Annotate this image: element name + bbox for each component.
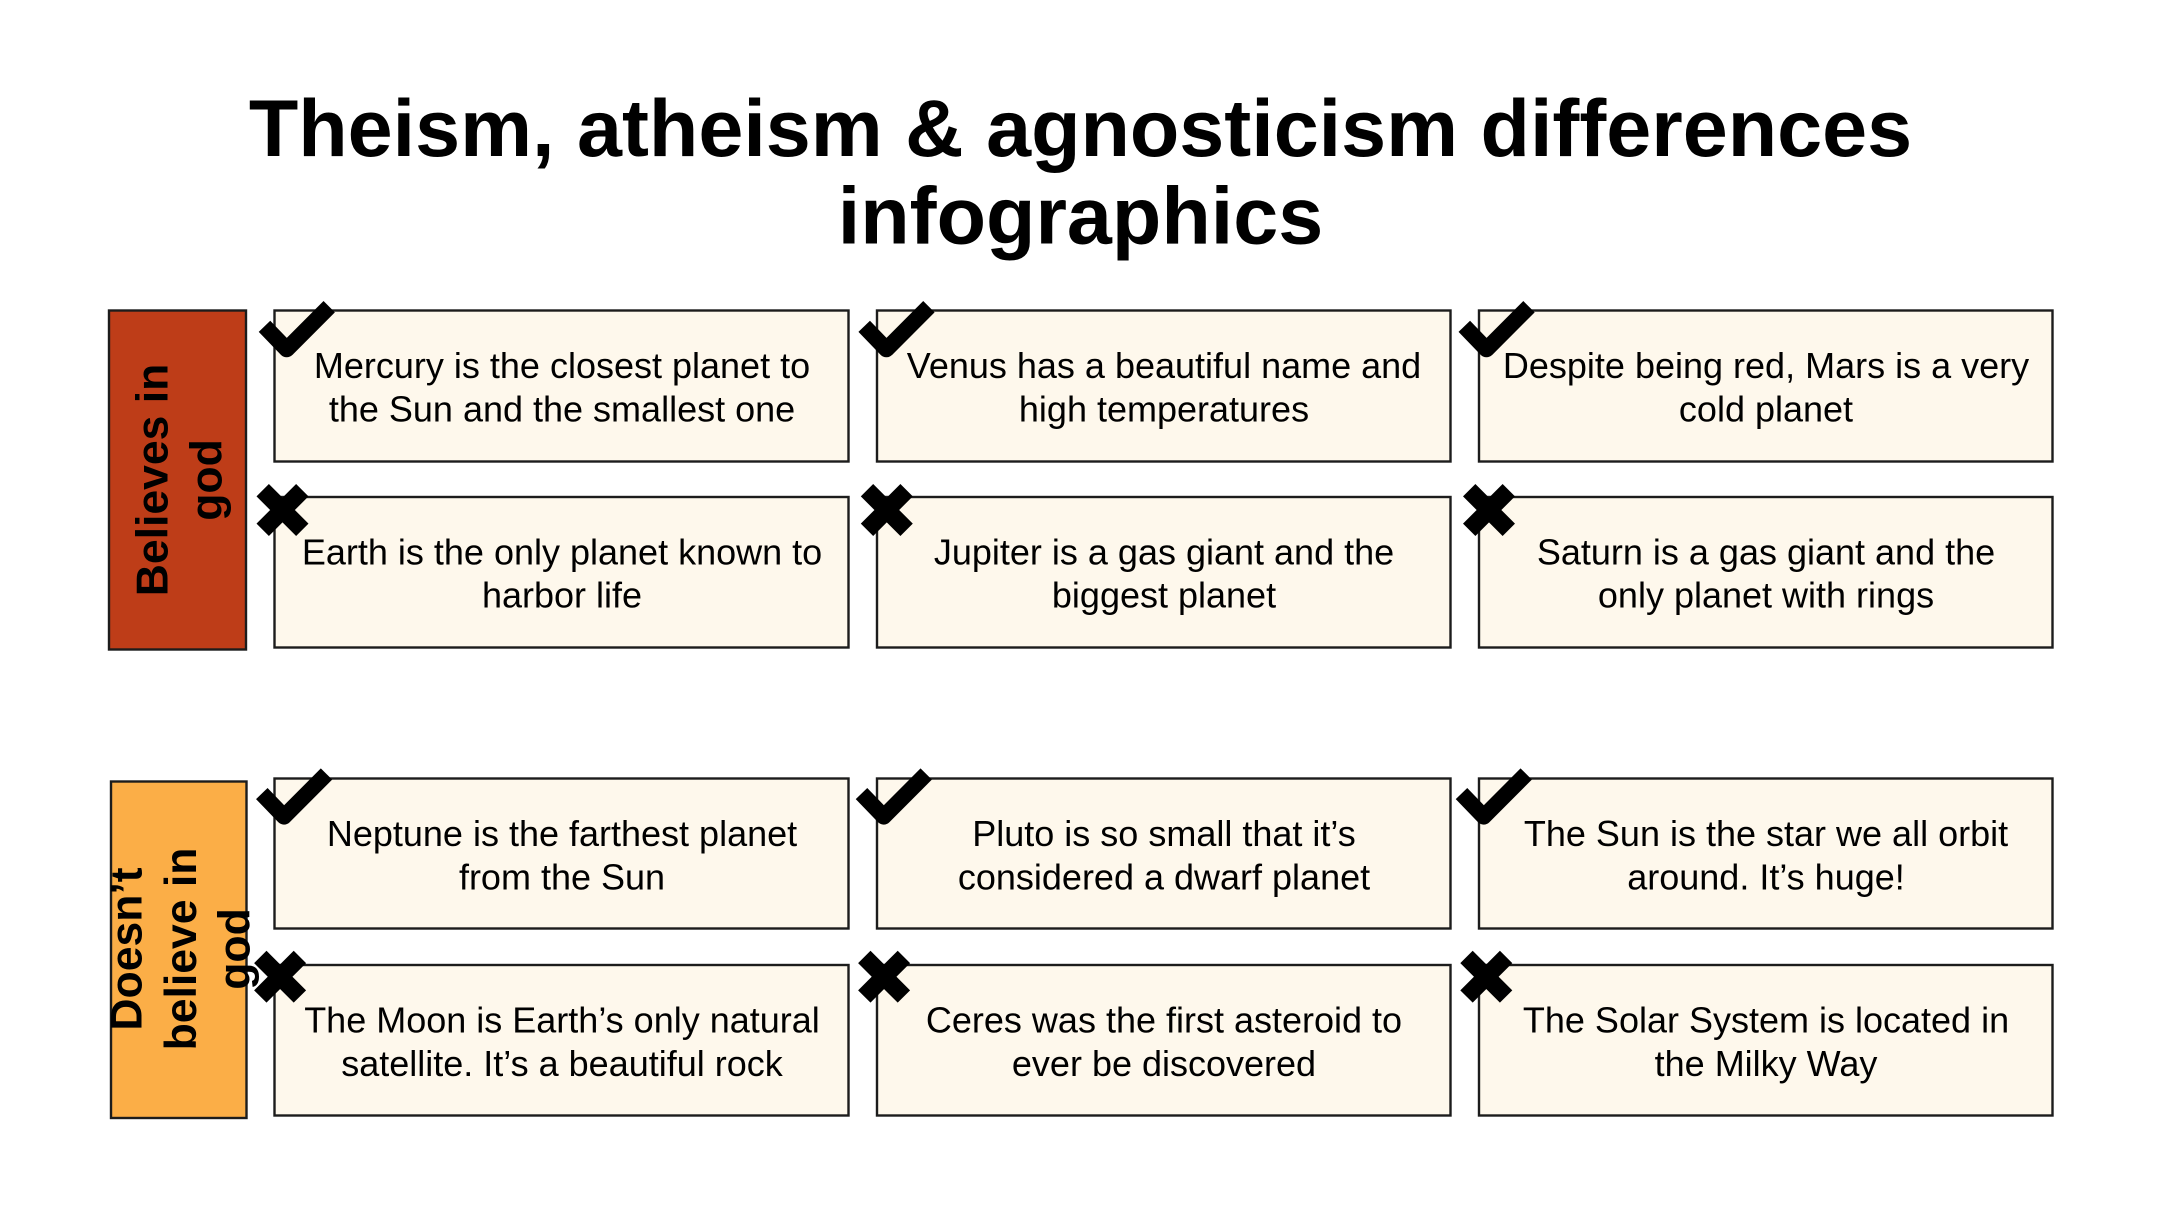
card: Jupiter: biggest planet: [1052, 575, 1276, 616]
card: Pluto: considered a dwarf planet: [958, 856, 1370, 898]
card: Moon: [274, 965, 848, 1116]
card: Saturn: [1479, 497, 2052, 648]
card: Sun: The Sun is the star we all orbit: [1524, 813, 2008, 854]
category box: believes in god: [109, 310, 246, 650]
card: Solar System: The Solar System is located in: [1523, 1000, 2009, 1041]
title: infographics: [838, 171, 1323, 261]
card: Mercury: Mercury is the closest planet to: [314, 345, 810, 386]
card: Solar System: the Milky Way: [1655, 1043, 1877, 1084]
card: Mercury: [274, 310, 848, 462]
card: Neptune: Neptune is the farthest planet: [327, 813, 797, 854]
icon: check mark (Sun): [1462, 774, 1526, 817]
card: Saturn: only planet with rings: [1598, 575, 1934, 616]
card: Neptune: from the Sun: [459, 856, 665, 898]
card: Earth: harbor life: [482, 575, 642, 616]
card: Ceres: [877, 965, 1450, 1116]
card: Venus: Venus has a beautiful name and: [907, 345, 1421, 386]
card: Pluto: [877, 778, 1450, 928]
icon: cross mark (Ceres): [864, 957, 904, 996]
icon: cross mark (Saturn): [1469, 490, 1509, 530]
card: Jupiter: [877, 497, 1450, 648]
icon: cross mark (Jupiter): [867, 490, 907, 530]
icon: check mark (Mars): [1464, 307, 1529, 349]
card: Sun: [1479, 778, 2052, 928]
icon: cross mark (Solar System): [1466, 957, 1506, 996]
card: Saturn: Saturn is a gas giant and the: [1537, 532, 1995, 572]
card: Pluto: Pluto is so small that it’s: [972, 813, 1356, 854]
icon: check mark (Pluto): [862, 774, 926, 817]
card: Mars: cold planet: [1679, 389, 1853, 430]
card: Ceres: Ceres was the first asteroid to: [926, 1000, 1402, 1041]
card: Mars: Despite being red, Mars is a very: [1503, 345, 2029, 386]
card: Earth: Earth is the only planet known to: [302, 532, 822, 572]
category box: believes in god: god: [183, 439, 232, 521]
card: Ceres: ever be discovered: [1012, 1043, 1316, 1084]
icon: cross mark (Earth): [263, 490, 302, 530]
card: Mars: [1479, 310, 2052, 462]
panel: believes in god: [109, 307, 2052, 650]
card: Sun: around. It’s huge!: [1627, 856, 1905, 898]
panel: does not believe in god: [103, 774, 2053, 1118]
icon: check mark (Neptune): [262, 774, 326, 817]
category box: doesn't believe in god: believe in: [157, 848, 206, 1050]
card: Moon: The Moon is Earth’s only natural: [304, 1000, 820, 1041]
icon: check mark (Venus): [864, 307, 929, 349]
category box: believes in god: Believes in: [128, 364, 177, 596]
card: Venus: high temperatures: [1019, 389, 1309, 430]
category box: doesn't believe in god: Doesn’t: [103, 867, 152, 1031]
card: Neptune: [274, 778, 848, 928]
icon: cross mark (Moon): [260, 957, 300, 996]
card: Jupiter: Jupiter is a gas giant and the: [934, 532, 1394, 572]
category box: doesn't believe in god: god: [210, 908, 259, 990]
card: Venus: [877, 310, 1450, 462]
title: Theism, atheism & agnosticism differences: [249, 84, 1912, 174]
icon: check mark (Mercury): [264, 307, 329, 349]
card: Solar System: [1479, 965, 2052, 1116]
card: Mercury: the Sun and the smallest one: [329, 389, 795, 430]
category box: doesn't believe in god: [103, 782, 259, 1118]
card: Moon: satellite. It’s a beautiful rock: [341, 1043, 784, 1084]
card: Earth: [274, 497, 848, 648]
